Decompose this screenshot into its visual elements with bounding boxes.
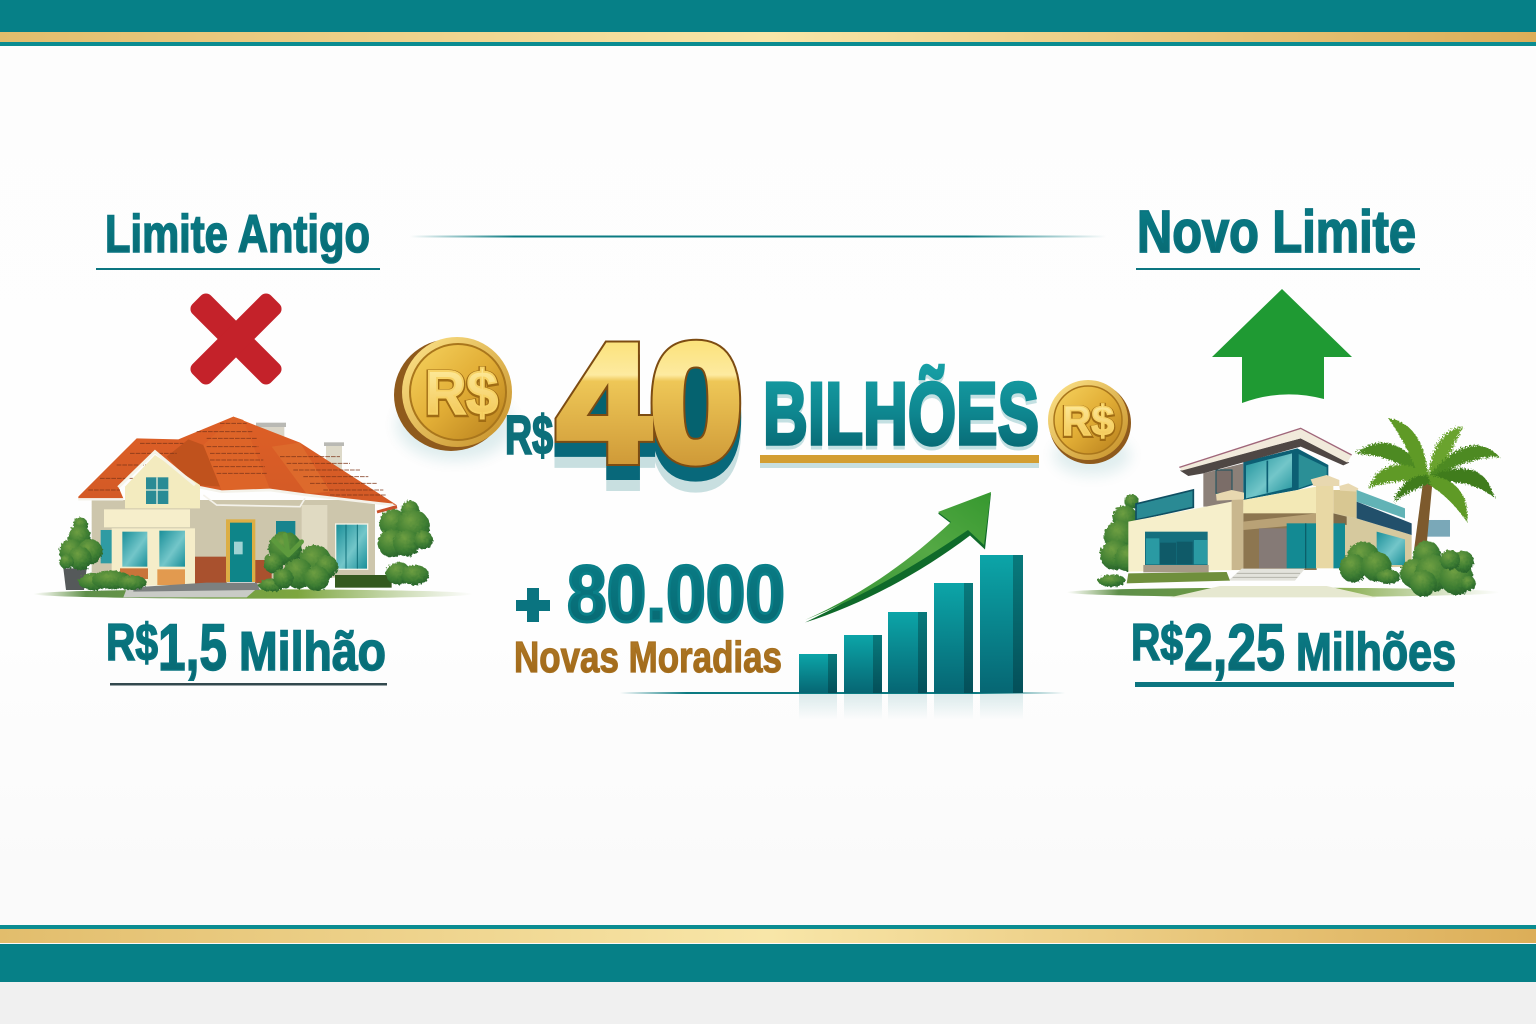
value: R$2,25 Milhões: 2,25 <box>1184 610 1285 684</box>
coin right <box>1048 380 1131 475</box>
rising arrow <box>805 492 991 622</box>
top decorative band <box>0 0 1536 46</box>
coin symbol: R$ <box>425 360 498 429</box>
value: R$2,25 Milhões <box>1131 610 1456 684</box>
divider line at top of centre <box>410 236 1106 238</box>
gold underline <box>760 455 1039 468</box>
value: R$2,25 Milhões: Milhões <box>1296 623 1456 682</box>
label Novas Moradias: Novas Moradias <box>514 633 782 682</box>
bottom decorative band <box>0 925 1536 1024</box>
big number 40: 40 <box>558 336 742 520</box>
panel: old limit <box>33 205 473 686</box>
value: R$1,5 Milhão: 1,5 <box>158 610 227 684</box>
big number 40: 40 <box>558 325 742 509</box>
BILHÕES word <box>763 364 1039 467</box>
big number 40: 40 <box>558 311 742 495</box>
small currency label: R$ <box>505 404 553 466</box>
illustration: traditional house <box>33 417 473 599</box>
coin symbol: R$ <box>1062 398 1114 445</box>
icon: red cross <box>188 291 284 387</box>
panel: new homes <box>514 492 1065 720</box>
coin symbol: R$ <box>425 359 498 428</box>
value: R$1,5 Milhão: Milhão <box>239 620 386 682</box>
number 80.000: 80.000 <box>567 549 785 638</box>
heading: Novo Limite: Novo Limite <box>1137 199 1416 265</box>
value: R$1,5 Milhão: R$ <box>106 614 158 672</box>
icon: green up arrow <box>1212 289 1352 403</box>
value: R$2,25 Milhões: R$ <box>1131 614 1183 672</box>
BILHÕES word: BILHÕES <box>763 368 1039 467</box>
illustration: modern house <box>1067 418 1500 597</box>
coin symbol: R$ <box>1062 397 1114 444</box>
BILHÕES word: BILHÕES <box>763 364 1039 463</box>
plus sign <box>516 588 550 622</box>
value: R$1,5 Milhão <box>106 610 386 684</box>
panel: new limit <box>1067 199 1500 687</box>
big number 40: 40 <box>558 311 742 495</box>
panel: centre total <box>394 311 1131 520</box>
heading: Limite Antigo: Limite Antigo <box>105 205 370 264</box>
coin left <box>394 337 513 460</box>
bar chart <box>620 555 1065 720</box>
heading underline <box>96 268 380 270</box>
value underline <box>110 683 387 686</box>
value underline <box>1135 682 1454 687</box>
heading underline <box>1136 268 1420 270</box>
